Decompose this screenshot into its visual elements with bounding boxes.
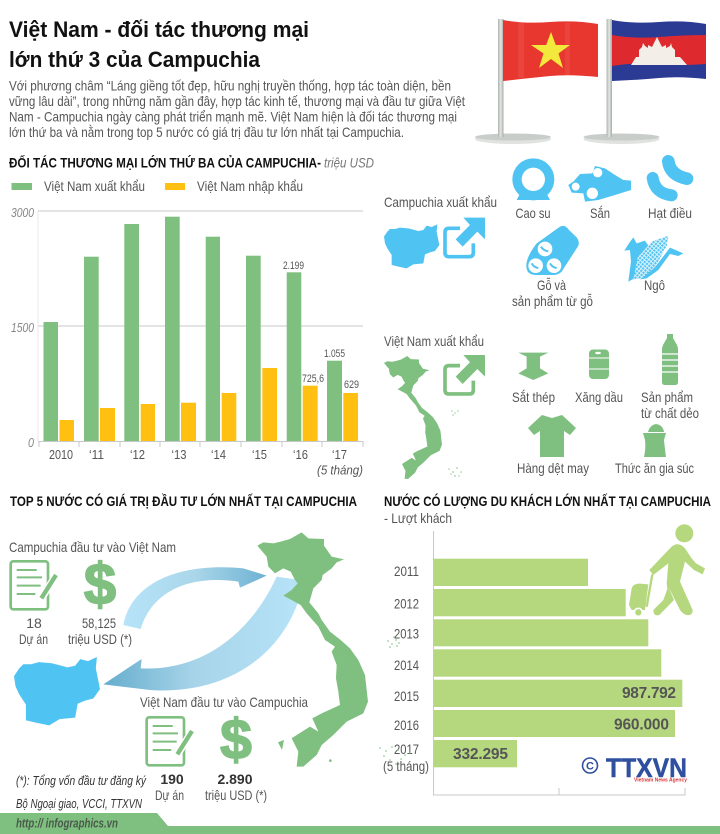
bar chart: tourists: 960.000 — [614, 716, 669, 734]
arrow: Cambodia to Vietnam — [123, 567, 267, 629]
label: rubber: Cao su — [516, 205, 550, 221]
bar chart: trade: ‘17 — [332, 447, 347, 462]
bar chart: trade: 629 — [344, 379, 359, 391]
logo: TTXVN: Vietnam News Agency — [634, 778, 688, 784]
panel: Cambodia invests in Vietnam — [9, 539, 176, 647]
title — [9, 17, 309, 72]
icon: wood — [526, 226, 579, 275]
bar chart: tourists: 332.295 — [453, 746, 508, 763]
icon: Vietnam map — [384, 356, 442, 479]
bar chart: trade: ‘11 — [89, 447, 104, 462]
bar chart: tourists: 987.792 — [622, 685, 676, 702]
heading: top 5 investment: TOP 5 NƯỚC CÓ GIÁ TRỊ ĐẦU TƯ LỚN NHẤT TẠI CAMPUCHIA — [10, 494, 357, 509]
map: Cambodia large — [14, 657, 100, 725]
stat: capital — [68, 615, 132, 647]
label: Vietnam invests: Việt Nam đầu tư vào Campuchia — [140, 694, 308, 710]
bar chart: trade: ‘15 — [252, 447, 267, 462]
bar chart: trade: 725,6 — [302, 373, 324, 385]
panel: Vietnam exports — [384, 333, 699, 479]
bar chart: tourists: 2017 — [394, 741, 419, 757]
bar chart: tourists: 2011 — [394, 563, 419, 579]
label: cashew: Hạt điều — [648, 205, 692, 221]
heading: trade partner chart: triệu USD — [324, 156, 374, 170]
icon: export arrow — [445, 218, 485, 257]
intro text block: Với phương châm “Láng giềng tốt đẹp, hữu nghị truyền thống, hợp tác toàn diện, bền — [9, 78, 451, 94]
legend — [12, 178, 303, 194]
label: textile: Hàng dệt may — [517, 460, 589, 476]
footer band: http:// infographics.vn — [16, 816, 118, 830]
decorative islands — [448, 410, 462, 477]
stat: capital: triệu USD (*) — [205, 787, 267, 803]
bar chart: tourists: 2013 — [394, 626, 419, 642]
stat: projects: Dự án — [155, 787, 184, 803]
bar chart: trade — [11, 205, 363, 478]
bar chart: trade: 2010 — [49, 447, 73, 462]
footnote and source: Bộ Ngoại giao, VCCI, TTXVN — [16, 796, 142, 811]
bar chart: trade: 3000 — [11, 205, 35, 220]
icon: document — [11, 561, 56, 609]
stat: projects — [19, 615, 48, 647]
bar chart: trade: (5 tháng) — [317, 462, 363, 478]
icon: cashew — [653, 161, 687, 195]
bar chart: trade: ‘14 — [211, 447, 226, 462]
bar chart: trade: 0 — [28, 435, 35, 450]
label: Cambodia invests: Campuchia đầu tư vào Việt Nam — [9, 539, 176, 555]
icon: traveller with suitcase — [629, 524, 705, 616]
label: wood — [512, 277, 593, 309]
label: feed: Thức ăn gia súc — [615, 460, 694, 476]
title: lớn thứ 3 của Campuchia — [9, 47, 261, 72]
icon: dollar: $ — [220, 708, 252, 772]
stat: capital: triệu USD (*) — [68, 631, 132, 647]
bar chart: tourists: 2012 — [394, 596, 419, 612]
icon: rubber — [512, 158, 554, 200]
bar chart: tourists: 2016 — [394, 717, 419, 733]
icon: cassava — [568, 166, 631, 202]
icon: Cambodia map — [384, 224, 439, 268]
icon: steel — [518, 353, 548, 380]
icon: flags — [475, 19, 706, 144]
icon: barrel — [589, 350, 609, 379]
stat: projects: Dự án — [19, 631, 48, 647]
logo: TTXVN: TTXVN — [606, 753, 687, 783]
label: corn: Ngô — [644, 277, 665, 293]
stat: projects — [155, 771, 184, 803]
label: wood: Gỗ và — [537, 277, 566, 293]
footnote and source: (*): Tổng vốn đầu tư đăng ký — [16, 773, 147, 788]
bar chart: trade: ‘12 — [130, 447, 145, 462]
icon: dollar: $ — [84, 552, 116, 617]
label: plastic: từ chất dẻo — [641, 405, 699, 421]
label: plastic — [641, 389, 699, 421]
bar chart: tourists: (5 tháng) — [383, 758, 429, 774]
label: cassava: Sắn — [590, 205, 610, 221]
bar chart: trade: 1500 — [11, 320, 35, 335]
bar chart: tourists — [379, 531, 685, 795]
stat: capital: 58,125 — [82, 615, 116, 631]
logo: TTXVN: C — [586, 760, 594, 772]
legend: Việt Nam nhập khẩu — [197, 178, 303, 194]
footer band — [0, 813, 720, 834]
legend: Việt Nam xuất khẩu — [44, 178, 145, 194]
intro text block: Nam - Campuchia ngày càng phát triển mạnh mẽ. Việt Nam hiện là đối tác thương mại — [9, 108, 457, 124]
intro text block: lớn thứ ba và nằm trong top 5 nước có giá trị đầu tư lớn nhất tại Campuchia. — [9, 124, 404, 140]
bar chart: trade: 1.055 — [324, 348, 345, 360]
label: fuel: Xăng dầu — [575, 389, 623, 405]
stat: capital — [205, 771, 267, 803]
stat: projects: 18 — [26, 615, 42, 631]
title: Việt Nam - đối tác thương mại — [9, 17, 309, 42]
icon: bottle — [662, 334, 678, 385]
icon: export arrow green — [445, 355, 485, 394]
heading: trade partner chart: ĐỐI TÁC THƯƠNG MẠI LỚN THỨ BA CỦA CAMPUCHIA- — [9, 156, 321, 170]
stat: capital: 2.890 — [217, 771, 253, 787]
bar chart: trade: 2.199 — [283, 260, 304, 272]
bar chart: trade: ‘13 — [172, 447, 186, 462]
footnote and source — [16, 773, 147, 811]
panel: Cambodia exports — [384, 158, 692, 309]
arrow: Vietnam to Cambodia — [103, 577, 307, 690]
icon: document — [147, 717, 192, 765]
heading: Cambodia exports: Campuchia xuất khẩu — [384, 194, 497, 210]
intro text block — [9, 78, 465, 140]
subtitle: tourists unit: - Lượt khách — [384, 510, 452, 526]
stat: projects: 190 — [160, 771, 184, 787]
map: Vietnam large — [257, 532, 368, 767]
icon: shirt — [528, 415, 576, 457]
bar chart: tourists: 2014 — [394, 657, 419, 673]
label: plastic: Sản phẩm — [641, 389, 693, 405]
intro text block: vững lâu dài”, trong những năm gần đây, hợp tác kinh tế, thương mại và đầu tư giữa Việt — [9, 93, 465, 109]
icon: corn — [624, 236, 683, 282]
label: wood: sản phẩm từ gỗ — [512, 293, 593, 309]
icon: sack — [643, 424, 666, 457]
label: steel: Sắt thép — [512, 389, 555, 405]
heading: Vietnam exports: Việt Nam xuất khẩu — [384, 333, 484, 349]
bar chart: tourists: 2015 — [394, 688, 419, 704]
panel: Vietnam invests in Cambodia — [140, 694, 308, 803]
bar chart: trade: ‘16 — [293, 447, 308, 462]
